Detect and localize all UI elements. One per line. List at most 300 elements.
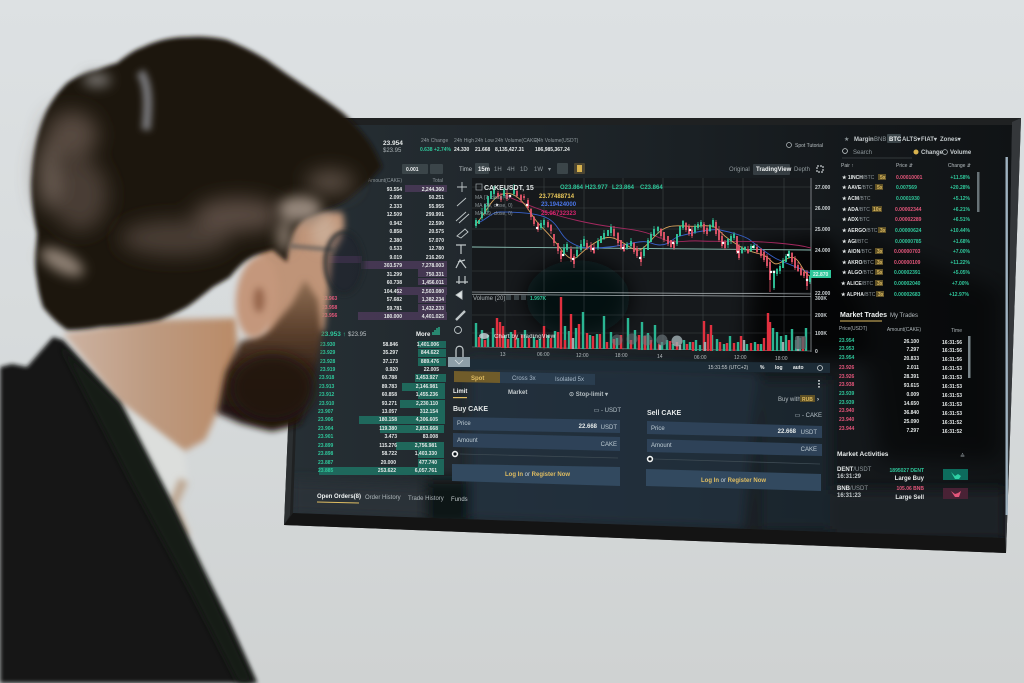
order form tabs: [453, 371, 819, 403]
sell side depth bars: [328, 185, 447, 320]
buy slider: [453, 452, 618, 458]
panel: sell form: Sell CAKE: [647, 410, 682, 417]
order book: buy side: 23.929: [320, 350, 336, 356]
forehead and cheek light: [311, 214, 337, 250]
panel: sell form: [646, 410, 822, 491]
market pair list: 0.00000785: [895, 239, 922, 245]
market pair list: 0.00000109: [894, 260, 921, 266]
order form tabs: Spot: [471, 376, 484, 382]
sell price input: Price: [651, 426, 665, 432]
glasses: [290, 232, 363, 294]
jacket: [0, 337, 257, 683]
order book: sell side: 60.738: [387, 280, 402, 286]
reflection: bottom glare on screen: [346, 370, 1005, 538]
volume legend: Volume (20): [473, 296, 505, 302]
chart legend: symbol and moving average readouts: L23.864: [612, 185, 635, 191]
market pair list: ★ ADX/BTC: [842, 217, 870, 223]
market pair list: +6.21%: [953, 207, 971, 213]
market activities: BNB/USDT: [837, 486, 868, 492]
panel: buy form: ▭ - USDT: [594, 408, 621, 414]
lower hair band: [120, 171, 354, 256]
order book: sell side: 303.579: [384, 263, 402, 269]
market trades list: 7.297: [906, 347, 919, 353]
market pair list: 5x: [877, 270, 883, 276]
market pair list: +1.68%: [953, 239, 971, 245]
market pair list: 3x: [880, 228, 886, 234]
market pair list: +7.00%: [953, 249, 971, 255]
order book: buy side: 60.858: [382, 392, 397, 398]
buy price input: Price: [457, 421, 471, 427]
chart toolbar: Original: [729, 167, 750, 173]
time axis labels: 18:00: [775, 356, 788, 362]
order book: sell side: 2.095: [389, 195, 402, 201]
sell slider: [648, 457, 820, 464]
market trades list: 28.391: [904, 374, 919, 380]
beard core: [230, 354, 314, 422]
market pair list: 0.00000624: [895, 228, 922, 234]
market pair list: 0.00002391: [894, 270, 921, 276]
market pair list: 0.00002344: [895, 207, 922, 213]
order book: sell side: 50.251: [429, 195, 444, 201]
order book: sell side: Amount(CAKE): [368, 178, 402, 184]
market pair list: ★ ALPHA/BTC: [841, 292, 876, 298]
market activities: Large Buy: [895, 476, 925, 482]
market pair list: Price ⇵: [896, 163, 913, 169]
icon: large buy trend button: [943, 469, 968, 480]
order book: buy side: 2,230.110: [416, 401, 438, 407]
shirt placket: [170, 478, 190, 536]
bottom order tabs: Funds: [451, 497, 468, 503]
order book: buy side: 180.158: [379, 417, 397, 423]
market activities: 105.06 BNB: [896, 486, 924, 492]
order book: sell side: [322, 178, 447, 320]
market pair list: ★ AKRO/BTC: [842, 260, 874, 266]
screen scrollbar: [1006, 157, 1008, 515]
market pair list: +5.05%: [953, 270, 971, 276]
order book: buy side: 844.622: [421, 350, 439, 356]
market trades list: 23.953: [839, 346, 855, 352]
chart toolbar: Time: [459, 167, 473, 173]
order book: sell side: 31.299: [387, 272, 402, 278]
order book: sell side: 23.963: [322, 296, 338, 302]
chart legend: symbol and moving average readouts: MA (25, close, 0): [475, 203, 513, 209]
price axis labels: 0: [815, 349, 818, 355]
order book: sell side: 4,401.025: [422, 314, 444, 320]
volume bars: [476, 297, 806, 351]
panel: sell form: ▭ - CAKE: [795, 413, 822, 419]
ticker header: 0.638 +2.74%: [420, 147, 452, 153]
market activities: 16:31:29: [837, 474, 862, 480]
market activities: DENT/USDT: [837, 467, 872, 473]
volume legend: 1.997K: [530, 296, 547, 302]
order book: buy side: 20.000: [381, 460, 396, 466]
buy amount input: [453, 433, 620, 451]
chart toolbar: 4H: [507, 167, 515, 173]
sell login button: [646, 469, 821, 491]
market trades list: Time: [951, 328, 962, 334]
market pair list: 0.0001930: [896, 196, 920, 202]
buy price input: 22.668: [579, 424, 598, 430]
market trades list: 16:31:53: [942, 375, 962, 381]
market trades list: 0.009: [906, 392, 919, 398]
chart toolbar: 0.001: [406, 167, 419, 173]
market trades list: 2.011: [907, 365, 919, 371]
market pair list: 10x: [873, 207, 882, 213]
chart toolbar: 1D: [520, 167, 528, 173]
market pair list: 3x: [877, 260, 883, 266]
order book: buy side: 23.912: [319, 392, 335, 398]
price axis labels: 22.870: [813, 272, 829, 278]
order book: sell side: 9.019: [389, 255, 402, 261]
order book: buy side: 23.904: [318, 426, 334, 432]
market selector header: Margin: [854, 137, 874, 143]
market activities: ≙: [960, 453, 965, 460]
chart toolbar: 1H: [494, 167, 502, 173]
market pair list: ★ ALGO/BTC: [842, 270, 874, 276]
chart toolbar: 15m: [478, 167, 490, 173]
ticker header: 24h Low: [475, 138, 494, 144]
order book: buy side: 1,453.927: [416, 375, 438, 381]
market activities: [837, 451, 968, 501]
market selector header: Zones▾: [940, 137, 962, 143]
ticker header: 24h Volume(CAKE): [495, 138, 539, 144]
market trades list: 23.939: [839, 400, 855, 406]
market trades list: 23.926: [839, 365, 855, 371]
order book: buy side: 58.846: [383, 342, 398, 348]
price axis labels: [810, 185, 831, 355]
order book: buy side: 2,146.981: [416, 384, 438, 390]
order book: buy side: 23.919: [320, 367, 336, 373]
market pair list: 5x: [880, 175, 886, 181]
time axis labels: 06:00: [537, 352, 550, 358]
market pair list: ★ ALICE/BTC: [841, 281, 873, 287]
order book: sell side: 1,456.011: [422, 280, 444, 286]
market pair list: +10.44%: [950, 228, 971, 234]
order book: buy side: 312.154: [420, 409, 438, 415]
chart status bar: %: [760, 365, 765, 371]
order book: sell side: 57.070: [429, 238, 444, 244]
person: [0, 37, 382, 683]
grey streak on crown: [140, 72, 148, 130]
order book: buy side: 6,057.761: [415, 468, 437, 474]
order book: sell side: 59.781: [387, 306, 402, 312]
order book: buy side: [318, 341, 446, 475]
time axis labels: 13: [500, 352, 506, 358]
market pair list: ★ ACM/BTC: [842, 196, 871, 202]
monitor screen: [290, 125, 1012, 540]
order form tabs: Isolated 5x: [555, 377, 584, 383]
chart toolbar: Depth: [794, 167, 810, 173]
order book: buy side: 4,306.605: [416, 417, 438, 423]
sell price input: [647, 421, 822, 438]
chart status bar: log: [775, 365, 782, 371]
order book: buy side: 3.473: [384, 434, 397, 440]
order book: buy side: 23.928: [320, 359, 336, 365]
market pair list: 5x: [877, 185, 883, 191]
drawing tools column: [454, 182, 469, 358]
order form tabs: Limit: [453, 389, 467, 395]
beard: [217, 280, 322, 431]
order book: sell side: 12.780: [429, 246, 444, 252]
market pair list: 0.00002289: [895, 217, 922, 223]
price axis labels: 22.000: [815, 291, 831, 297]
buy amount input: CAKE: [601, 442, 617, 448]
ear: [232, 254, 282, 340]
market pair list: ★ AAVE/BTC: [842, 185, 873, 191]
market trades list: 16:31:52: [942, 429, 962, 435]
order book: buy side: 115.276: [379, 443, 397, 449]
market selector header: Volume: [950, 150, 972, 156]
price axis labels: 200K: [815, 313, 827, 319]
chart legend: symbol and moving average readouts: 23.19424000: [541, 202, 577, 208]
order book: buy side: 1,403.330: [415, 451, 437, 457]
market selector header: ALTS▾: [902, 137, 921, 143]
volume legend: [473, 295, 547, 302]
sell amount input: CAKE: [801, 447, 817, 453]
order book: buy side: 23.918: [319, 375, 335, 381]
order book: sell side: 2.333: [389, 204, 402, 210]
ticker header: 21.668: [475, 147, 491, 153]
ticker header: 186,985,367.24: [535, 147, 570, 153]
buy price input: [453, 417, 620, 433]
market selector header: ★: [844, 136, 849, 143]
chart toolbar: ▾: [548, 167, 551, 173]
order book: buy side: 477.740: [419, 460, 437, 466]
order book: sell side: 23.956: [322, 313, 338, 319]
panel: chart area: [448, 178, 1000, 460]
order book: sell side: Total: [432, 178, 443, 184]
buy amount input: Amount: [457, 438, 478, 444]
market trades list: 25.090: [904, 419, 919, 425]
order book: buy side: 23.899: [318, 443, 334, 449]
order book: sell side: 55.955: [429, 204, 444, 210]
chart watermark and zoom buttons: Chart by TradingView: [494, 334, 556, 340]
market pair list: +5.12%: [953, 196, 971, 202]
order book: sell side: 180.000: [384, 314, 402, 320]
panel: buy form: [452, 406, 621, 486]
chart status bar: 15:31:55 (UTC+2): [708, 365, 748, 371]
order book: buy side: 2,853.668: [416, 426, 438, 432]
hair: [31, 37, 382, 330]
market trades list: 16:31:52: [942, 420, 962, 426]
bottom order tabs: [317, 494, 468, 503]
market trades list: 16:31:53: [942, 366, 962, 372]
order book: sell side: 750.331: [426, 272, 444, 278]
chart watermark and zoom buttons: [479, 333, 806, 349]
market pair list: Change ⇵: [948, 163, 971, 169]
screen contents: [317, 134, 1008, 515]
market pair list: ★ ADA/BTC: [842, 207, 870, 213]
market activities: 1895027 DENT: [890, 468, 924, 474]
market pair list: 3x: [877, 281, 883, 287]
order book: last price: More: [416, 332, 431, 338]
market trades list: My Trades: [890, 313, 918, 319]
market pair list: 3x: [877, 249, 883, 255]
order book: last price: [321, 327, 439, 338]
market pair list: 0.00010001: [896, 175, 923, 181]
market pair list: +20.28%: [950, 185, 971, 191]
order book: sell side: 0.533: [389, 246, 402, 252]
chart status bar: auto: [793, 365, 804, 371]
shirt: [118, 402, 203, 572]
market selector header: FIAT▾: [921, 137, 938, 143]
order book: buy side: 119.380: [379, 426, 397, 432]
market pair list: [841, 163, 980, 298]
panel: buy form: Buy CAKE: [453, 406, 488, 413]
market pair list: 3x: [878, 292, 884, 298]
order book: sell side: 2,244.360: [422, 187, 444, 193]
market trades list: 36.840: [904, 410, 919, 416]
order book: buy side: 23.887: [318, 460, 334, 466]
candlesticks: [476, 184, 810, 292]
market activities: 16:31:23: [837, 493, 862, 499]
order book: buy side: 23.930: [320, 342, 336, 348]
buy login button: [452, 464, 620, 486]
monitor frame: [284, 118, 1021, 553]
neck: [63, 318, 240, 452]
order book: buy side: 89.783: [382, 384, 397, 390]
order book: sell side: 0.942: [389, 221, 402, 227]
ticker header: 24h Volume(USDT): [535, 138, 579, 144]
order book: buy side: 23.910: [319, 401, 335, 407]
order book: buy side: 253.622: [378, 468, 396, 474]
market trades list: 20.833: [904, 356, 919, 362]
market trades list: 23.926: [839, 374, 855, 380]
market pair list: Pair ↑: [841, 163, 854, 169]
chart status bar: [448, 360, 830, 373]
price axis labels: 100K: [815, 331, 827, 337]
time axis labels: 12:00: [576, 353, 589, 359]
chart legend: symbol and moving average readouts: H23.977: [585, 185, 608, 191]
order book: sell side: 216.260: [426, 255, 444, 261]
market pair list: 0.00000703: [894, 249, 921, 255]
market trades list: 23.944: [839, 426, 855, 432]
market activities: Market Activities: [837, 451, 889, 458]
order form tabs: Market: [508, 390, 527, 396]
icon: large sell trend button: [943, 488, 968, 499]
order book: buy side: 889.476: [421, 359, 439, 365]
moving average lines: [475, 193, 811, 276]
face: [258, 212, 344, 345]
order book: last price: 23.953 ↑: [321, 331, 346, 338]
order book: last price: $23.95: [348, 332, 367, 338]
sell price input: USDT: [801, 430, 817, 436]
time axis labels: 18:00: [615, 353, 628, 359]
sell price input: 22.668: [778, 429, 797, 435]
time axis labels: [500, 352, 788, 360]
price axis labels: 24.000: [815, 248, 831, 254]
order book: sell side: 93.554: [387, 187, 402, 193]
price axis labels: 25.000: [815, 227, 831, 233]
bottom order tabs: Order History: [365, 495, 401, 501]
order book: buy side: 2,756.981: [415, 443, 437, 449]
market trades list: 16:31:56: [942, 340, 962, 346]
time axis labels: 12:00: [734, 355, 747, 361]
buy price input: USDT: [601, 425, 617, 431]
ticker header: [383, 138, 579, 154]
market pair list: +11.22%: [950, 260, 971, 266]
sell login button: Log In or Register Now: [701, 478, 766, 484]
order book: sell side: 104.452: [384, 289, 402, 295]
market trades list: 23.940: [839, 417, 855, 423]
market trades list: Amount(CAKE): [887, 327, 921, 333]
chart legend: symbol and moving average readouts: MA (7, close, 0): [475, 195, 510, 201]
market trades list: 16:31:56: [942, 348, 962, 354]
market trades list: 14.650: [904, 401, 919, 407]
order book: buy side: 23.907: [318, 409, 334, 415]
chart toolbar: TradingView: [756, 167, 792, 173]
ticker header: 23.954: [383, 140, 403, 147]
ticker header: $23.95: [383, 148, 402, 154]
market trades list: 23.938: [839, 382, 855, 388]
order form tabs: Buy with: [778, 397, 801, 403]
market pair list: 0.007569: [896, 185, 917, 191]
ticker header: 24h High: [454, 138, 474, 144]
grey temple hair: [276, 196, 322, 252]
market trades list: 16:31:53: [942, 384, 962, 390]
market trades list: 23.940: [839, 408, 855, 414]
market trades list: 23.954: [839, 355, 855, 361]
order book: buy side: 83.008: [423, 434, 438, 440]
reflection: head silhouette in chart: [526, 230, 1000, 460]
market trades list: 23.939: [839, 391, 855, 397]
order book: buy side: 13.057: [382, 409, 397, 415]
order book: buy side: 60.788: [382, 375, 397, 381]
order book: buy side: 23.885: [318, 468, 334, 474]
market pair list: ★ AGI/BTC: [842, 239, 868, 245]
order book: buy side: 23.901: [318, 434, 334, 440]
sell amount input: Amount: [651, 443, 672, 449]
collapse button: [448, 357, 470, 367]
ticker header: 8,135,427.31: [495, 147, 524, 153]
order book: sell side: 299.991: [426, 212, 444, 218]
buy side depth bars: [319, 341, 446, 475]
market pair list: +12.97%: [949, 292, 970, 298]
order book: sell side: 1,432.233: [422, 306, 444, 312]
jacket lapel: [60, 345, 254, 683]
order form tabs: ⊙ Stop-limit ▾: [569, 392, 609, 398]
left hair tones: [38, 111, 108, 231]
order book: sell side: 57.682: [387, 297, 402, 303]
chart legend: symbol and moving average readouts: 23.77488714: [539, 194, 575, 200]
order book: buy side: 23.913: [319, 384, 335, 390]
market activities: Large Sell: [895, 495, 924, 501]
order book: sell side: 12.509: [387, 212, 402, 218]
time axis labels: 14: [657, 354, 663, 360]
order book: buy side: 58.722: [382, 451, 397, 457]
chart legend: symbol and moving average readouts: CAKEUSDT, 15: [484, 185, 534, 192]
order book: buy side: 37.173: [383, 359, 398, 365]
market trades list: 16:31:56: [942, 357, 962, 363]
sell amount input: [647, 439, 822, 456]
chart toolbar: Spot Tutorial: [795, 143, 823, 149]
order book: buy side: 93.271: [382, 401, 397, 407]
soft crown tip: [83, 73, 111, 87]
market pair list: 0.00002040: [894, 281, 921, 287]
order book: sell side: 0.858: [389, 229, 402, 235]
order book: buy side: 35.297: [383, 350, 398, 356]
market selector header: BNB: [874, 137, 886, 143]
grey patch at nape: [36, 242, 88, 282]
market selector header: [842, 134, 972, 158]
price axis labels: 27.000: [815, 185, 831, 191]
chart legend: symbol and moving average readouts: [475, 184, 663, 217]
market trades list: 93.615: [904, 383, 919, 389]
order book: sell side: 7,278.003: [422, 263, 444, 269]
market pair list: ★ AERGO/BTC: [842, 228, 878, 234]
order book: sell side: 2,503.080: [422, 289, 444, 295]
market trades list: 16:31:53: [942, 402, 962, 408]
